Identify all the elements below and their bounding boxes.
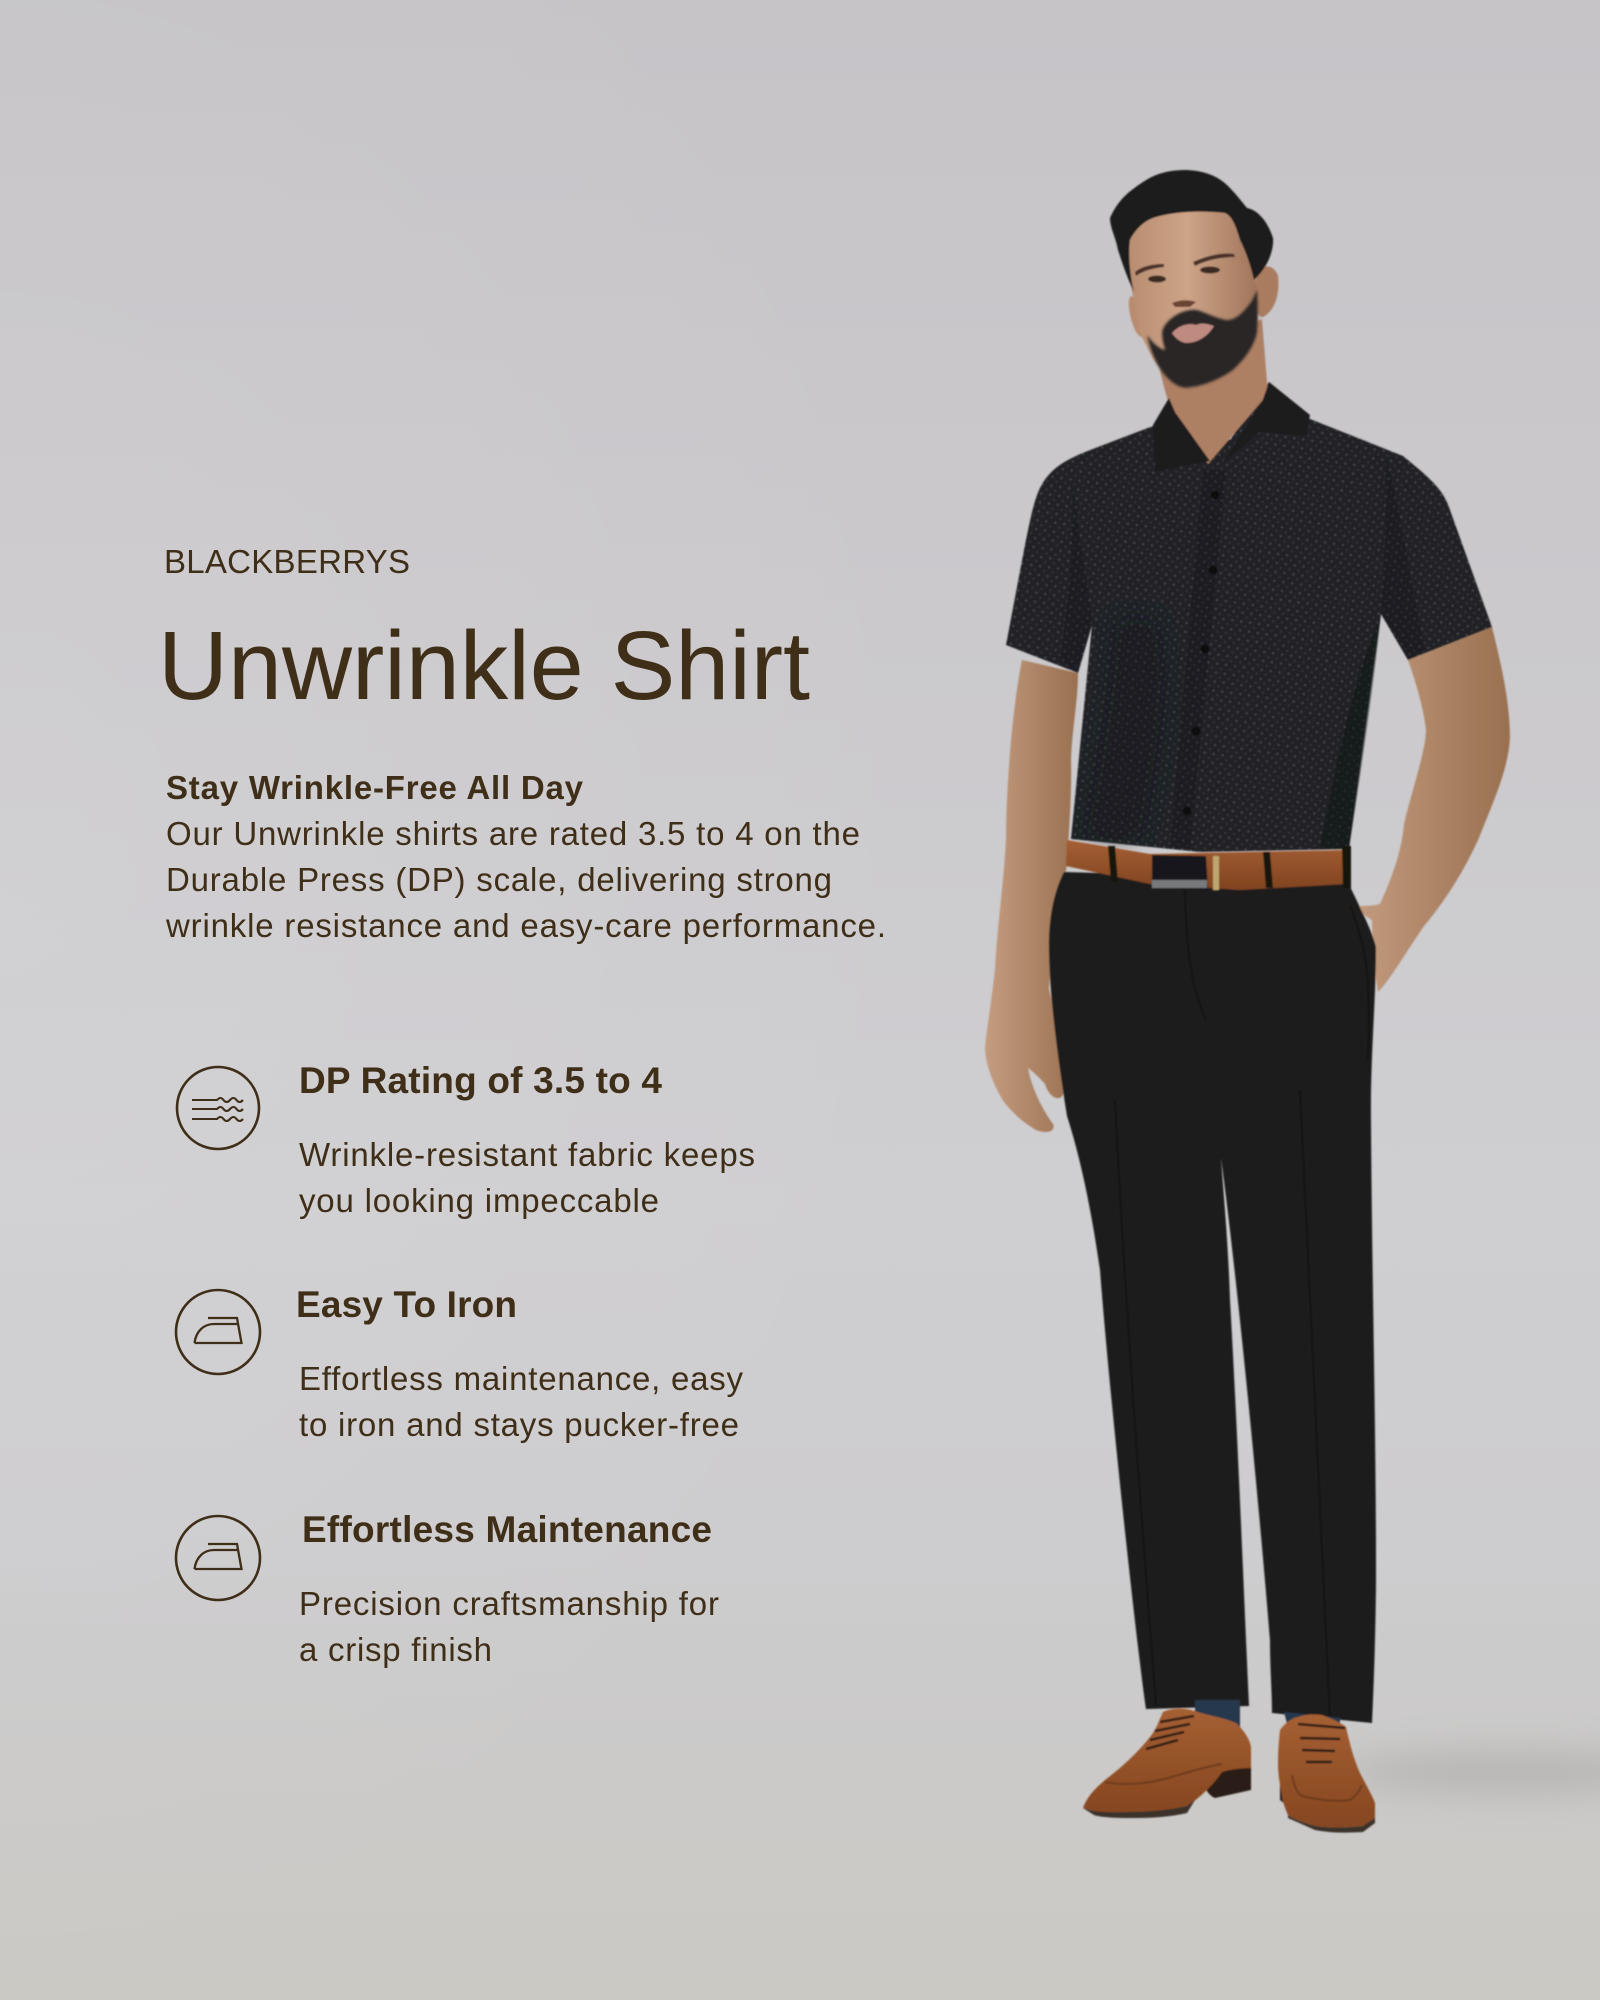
description: easy to iron: to iron and stays pucker-free [299,1406,739,1443]
collar [1153,382,1310,472]
trouser creases [1115,890,1369,1718]
left sock [1195,1700,1240,1728]
face [1129,211,1258,388]
right sock [1284,1712,1340,1735]
description: DP rating [299,1136,755,1219]
heading: DP rating: DP Rating of 3.5 to 4 [299,1060,662,1101]
neck [1158,319,1268,464]
model photo illustration [985,170,1510,1833]
feature: effortless maintenance [176,1509,719,1668]
intro paragraph: Durable Press (DP) scale, delivering strong [166,861,832,898]
right shoe [1278,1714,1375,1833]
shirt shading [1060,450,1425,849]
shirt buttons [1182,490,1220,816]
icon: iron in circle [176,1516,260,1600]
ears [1129,266,1278,337]
feature: DP rating [177,1060,755,1219]
intro heading: Stay Wrinkle-Free All Day [166,769,584,806]
lips [1172,323,1214,343]
icon: fabric waves in circle [177,1067,259,1149]
intro text block [165,769,886,944]
description: easy to iron [299,1360,744,1443]
left shoe [1083,1709,1251,1818]
description: effortless maintenance: a crisp finish [299,1631,492,1668]
intro paragraph: Our Unwrinkle shirts are rated 3.5 to 4 on the [166,815,860,852]
left arm and hand [985,660,1078,1132]
description: effortless maintenance [299,1585,719,1668]
icon: iron in circle [176,1290,260,1374]
description: easy to iron: Effortless maintenance, easy [299,1360,744,1397]
shirt [1006,382,1492,852]
eyes and brows [1135,253,1235,307]
beard [1147,290,1258,388]
trousers [1049,872,1376,1723]
description: DP rating: Wrinkle-resistant fabric keeps [299,1136,755,1173]
description: effortless maintenance: Precision craftsmanship for [299,1585,719,1622]
intro paragraph: wrinkle resistance and easy-care performance. [165,907,886,944]
buckle [1152,855,1208,891]
hair [1110,170,1273,292]
right arm [1350,627,1510,992]
feature: easy to iron [176,1284,744,1443]
title: Unwrinkle Shirt [158,611,810,720]
brand name: BLACKBERRYS [164,543,410,580]
heading: easy to iron: Easy To Iron [296,1284,517,1325]
description: DP rating: you looking impeccable [299,1182,659,1219]
intro paragraph [165,815,886,944]
belt [1066,840,1351,891]
heading: effortless maintenance: Effortless Maintenance [302,1509,712,1550]
